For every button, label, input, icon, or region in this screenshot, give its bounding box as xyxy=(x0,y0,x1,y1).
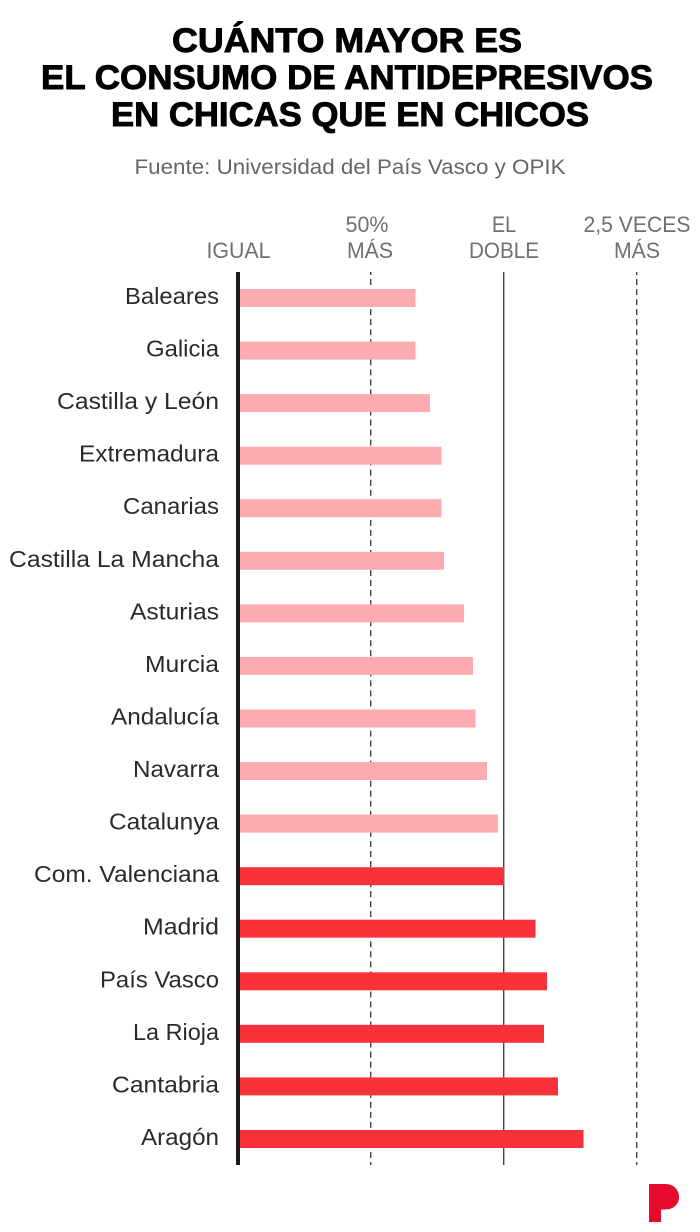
row: Com. Valenciana: Com. Valenciana xyxy=(34,861,219,887)
row: Navarra: Navarra xyxy=(133,756,219,782)
row: Galicia: Galicia xyxy=(146,336,219,362)
reference lines xyxy=(371,272,637,1165)
title: EN CHICAS QUE EN CHICOS xyxy=(111,96,589,134)
row: Catalunya xyxy=(109,809,498,835)
row: Andalucía xyxy=(111,704,476,730)
icon: P logo xyxy=(649,1184,679,1222)
row: Castilla y León: Castilla y León xyxy=(57,388,219,414)
bar chart xyxy=(9,283,584,1150)
row: La Rioja: La Rioja xyxy=(133,1019,219,1045)
title: EL CONSUMO DE ANTIDEPRESIVOS xyxy=(41,59,653,97)
axis header labels: EL xyxy=(492,212,516,237)
row: Castilla La Mancha: Castilla La Mancha xyxy=(9,546,219,572)
row: Canarias xyxy=(123,493,442,519)
axis header labels: IGUAL xyxy=(206,238,270,263)
row: Catalunya: Catalunya xyxy=(109,809,219,835)
source: Fuente: Universidad del País Vasco y OPIK xyxy=(134,155,566,179)
axis header labels: MÁS xyxy=(614,238,660,263)
row: Murcia: Murcia xyxy=(145,651,219,677)
row: Madrid xyxy=(143,914,536,940)
row: País Vasco: País Vasco xyxy=(100,966,219,992)
row: Castilla y León xyxy=(57,388,430,414)
axis header labels: 2,5 VECES xyxy=(584,212,690,237)
row: Cantabria xyxy=(112,1071,558,1097)
row: Navarra xyxy=(133,756,487,782)
baseline axis xyxy=(236,272,240,1165)
axis header labels: MÁS xyxy=(347,238,393,263)
row: Galicia xyxy=(146,336,416,362)
row: Madrid: Madrid xyxy=(143,914,219,940)
row: Aragón: Aragón xyxy=(141,1124,219,1150)
row: Com. Valenciana xyxy=(34,861,504,887)
title xyxy=(41,22,653,134)
title: CUÁNTO MAYOR ES xyxy=(172,22,522,60)
row: Extremadura xyxy=(79,441,442,467)
row: Aragón xyxy=(141,1124,584,1150)
row: Baleares xyxy=(125,283,416,309)
row: Baleares: Baleares xyxy=(125,283,219,309)
row: Asturias xyxy=(130,598,464,624)
row: Castilla La Mancha xyxy=(9,546,444,572)
axis header labels: DOBLE xyxy=(469,238,539,263)
row: La Rioja xyxy=(133,1019,544,1045)
row: Andalucía: Andalucía xyxy=(111,704,219,730)
row: País Vasco xyxy=(100,966,547,992)
row: Extremadura: Extremadura xyxy=(79,441,219,467)
row: Cantabria: Cantabria xyxy=(112,1071,219,1097)
axis header labels xyxy=(206,212,690,263)
row: Asturias: Asturias xyxy=(130,598,219,624)
row: Canarias: Canarias xyxy=(123,493,219,519)
row: Murcia xyxy=(145,651,473,677)
axis header labels: 50% xyxy=(346,212,388,237)
